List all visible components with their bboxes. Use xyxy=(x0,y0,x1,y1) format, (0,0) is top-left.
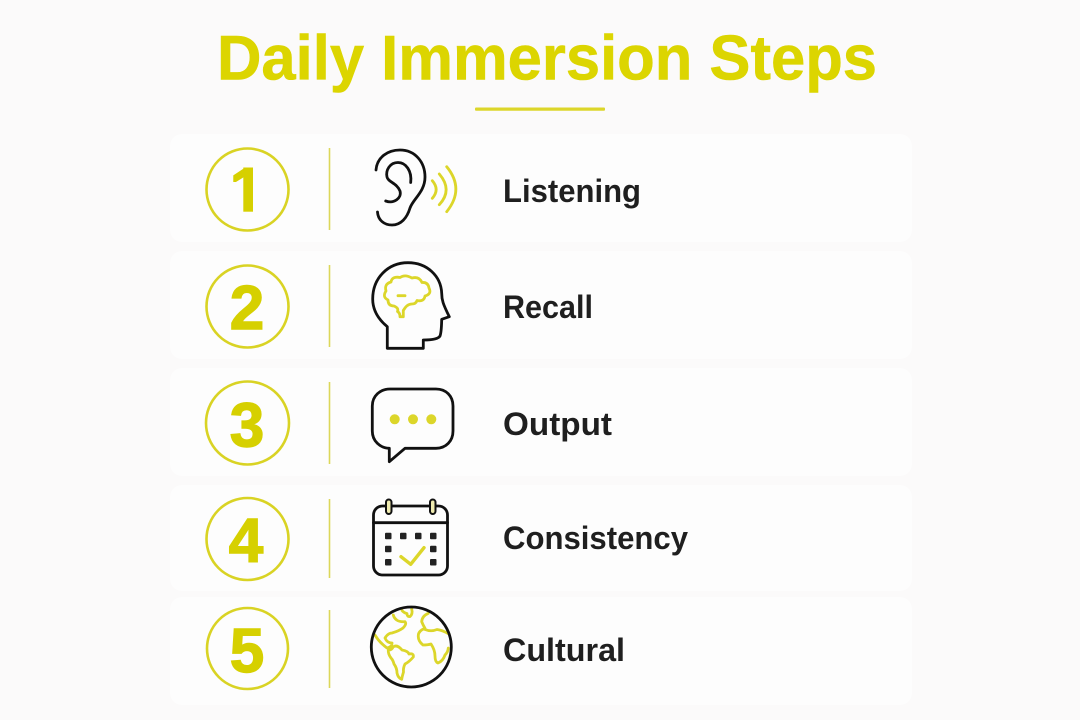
icon: head with brain xyxy=(373,263,449,348)
panel: step 5 cultural xyxy=(170,597,912,705)
title underline xyxy=(475,108,605,111)
title: Daily Immersion Steps xyxy=(217,24,877,94)
label: recall: Recall xyxy=(503,289,593,325)
label: output: Output xyxy=(503,406,612,442)
icon: globe xyxy=(371,607,451,687)
number badge 5: 5 xyxy=(230,617,264,686)
number badge 4: 4 xyxy=(229,506,264,576)
number badge 5 xyxy=(207,608,288,689)
panel: step 3 output xyxy=(170,368,912,476)
icon: ear with sound waves xyxy=(376,150,456,225)
label: cultural: Cultural xyxy=(503,632,625,668)
number badge 4 xyxy=(206,498,288,580)
number badge 1 xyxy=(206,148,288,230)
panel: step 1 listening xyxy=(205,147,639,232)
icon: speech bubble xyxy=(372,389,453,462)
panel: step 2 recall xyxy=(170,251,912,359)
number badge 3 xyxy=(206,382,289,464)
icon: calendar with check xyxy=(374,500,448,575)
label: consistency: Consistency xyxy=(503,520,688,556)
number badge 2 xyxy=(206,266,288,348)
number badge 3: 3 xyxy=(230,392,264,460)
number badge 2: 2 xyxy=(230,274,264,343)
panel: step 4 consistency xyxy=(170,485,912,591)
label: listening: Listening xyxy=(503,173,641,209)
number badge 1: 1 xyxy=(230,156,264,226)
